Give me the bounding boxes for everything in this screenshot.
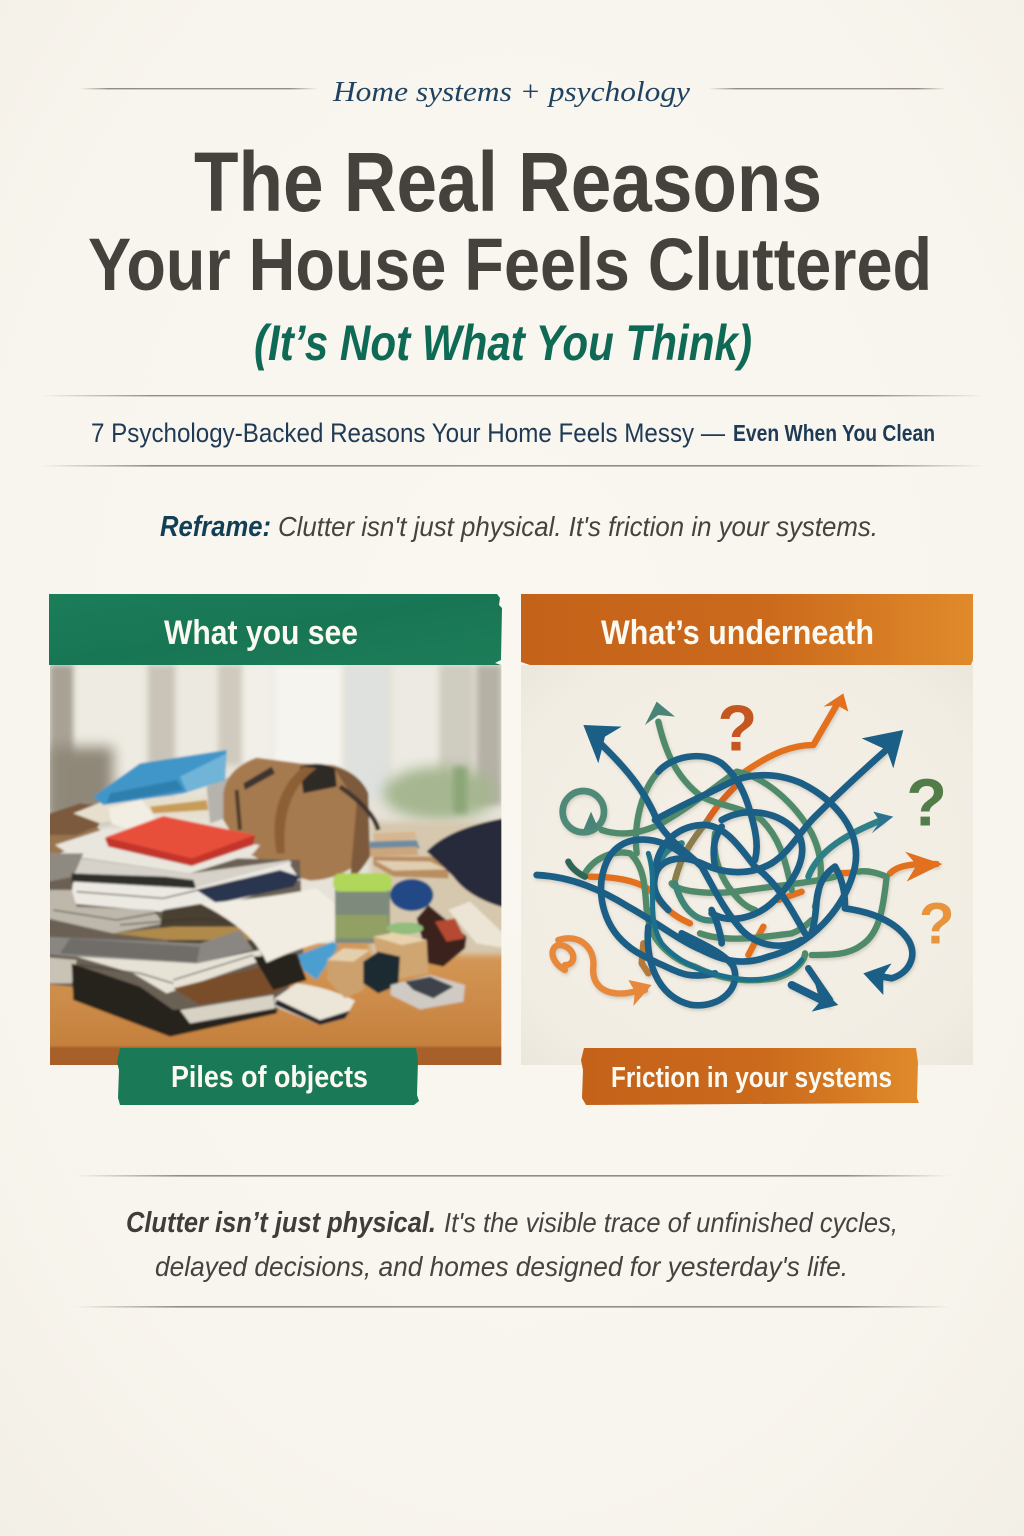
question marks: ? [906, 766, 947, 840]
panel: what you see [40, 594, 513, 1105]
pile underlay [50, 857, 304, 1014]
arrowheads and question marks [583, 692, 954, 1012]
reframe statement: Clutter isn't just physical. It's friction in your systems. [278, 511, 878, 542]
title: The Real Reasons [194, 135, 822, 229]
table surface [50, 942, 502, 1049]
panel: what's underneath [521, 594, 973, 1105]
back left stack [40, 777, 230, 853]
dark binder [72, 963, 277, 1037]
caption: friction in your systems [581, 1048, 919, 1105]
back books right [368, 832, 448, 878]
upper paper pile [55, 828, 260, 873]
title [88, 135, 932, 306]
heading bar: what's underneath: What’s underneath [601, 614, 874, 652]
notebook front [275, 983, 355, 1025]
title: Your House Feels Cluttered [88, 223, 932, 306]
orange curl [553, 938, 645, 993]
lower paper pile [160, 902, 257, 952]
photo of cluttered table [40, 657, 513, 1077]
arrowheads [583, 693, 942, 1012]
wooden blocks [373, 933, 428, 980]
backpack bag [223, 758, 368, 881]
closing statement: delayed decisions, and homes designed for yesterday's life. [155, 1251, 848, 1282]
question marks: ? [919, 891, 954, 956]
jar with green lid [335, 890, 390, 943]
red folder [104, 834, 256, 868]
caption: piles of objects: Piles of objects [171, 1059, 368, 1094]
green strands [563, 722, 887, 980]
heading bar: what you see: What you see [164, 614, 358, 652]
paper edge lines [53, 880, 253, 983]
closing statement: Clutter isn’t just physical. [126, 1207, 436, 1239]
eyebrow: Home systems + psychology: Home systems + psychology [332, 76, 690, 108]
blue item [390, 879, 433, 911]
teal overlay strands [648, 853, 802, 980]
subheading band [40, 395, 985, 467]
closing statement [75, 1175, 950, 1308]
question marks: ? [717, 692, 757, 765]
red box [417, 905, 467, 967]
closing statement: It's the visible trace of unfinished cycles, [444, 1207, 898, 1238]
dark coat [426, 817, 502, 908]
subheading band: 7 Psychology-Backed Reasons Your Home Feels Messy — [91, 418, 725, 448]
subtitle: (It’s Not What You Think) [254, 315, 752, 371]
curled white sheet [200, 890, 334, 964]
dark blue strands [537, 738, 912, 1005]
orange strands under tangle [590, 705, 937, 973]
blue pouch [93, 750, 227, 805]
tangled arrows illustration [537, 705, 937, 1005]
caption: piles of objects [117, 1048, 419, 1105]
reframe statement: Reframe: [160, 511, 271, 543]
heading bar: what you see [49, 594, 502, 665]
subheading band: Even When You Clean [733, 420, 935, 446]
heading bar: what's underneath [521, 594, 973, 665]
question marks [717, 692, 954, 956]
caption: friction in your systems: Friction in your systems [611, 1062, 892, 1094]
